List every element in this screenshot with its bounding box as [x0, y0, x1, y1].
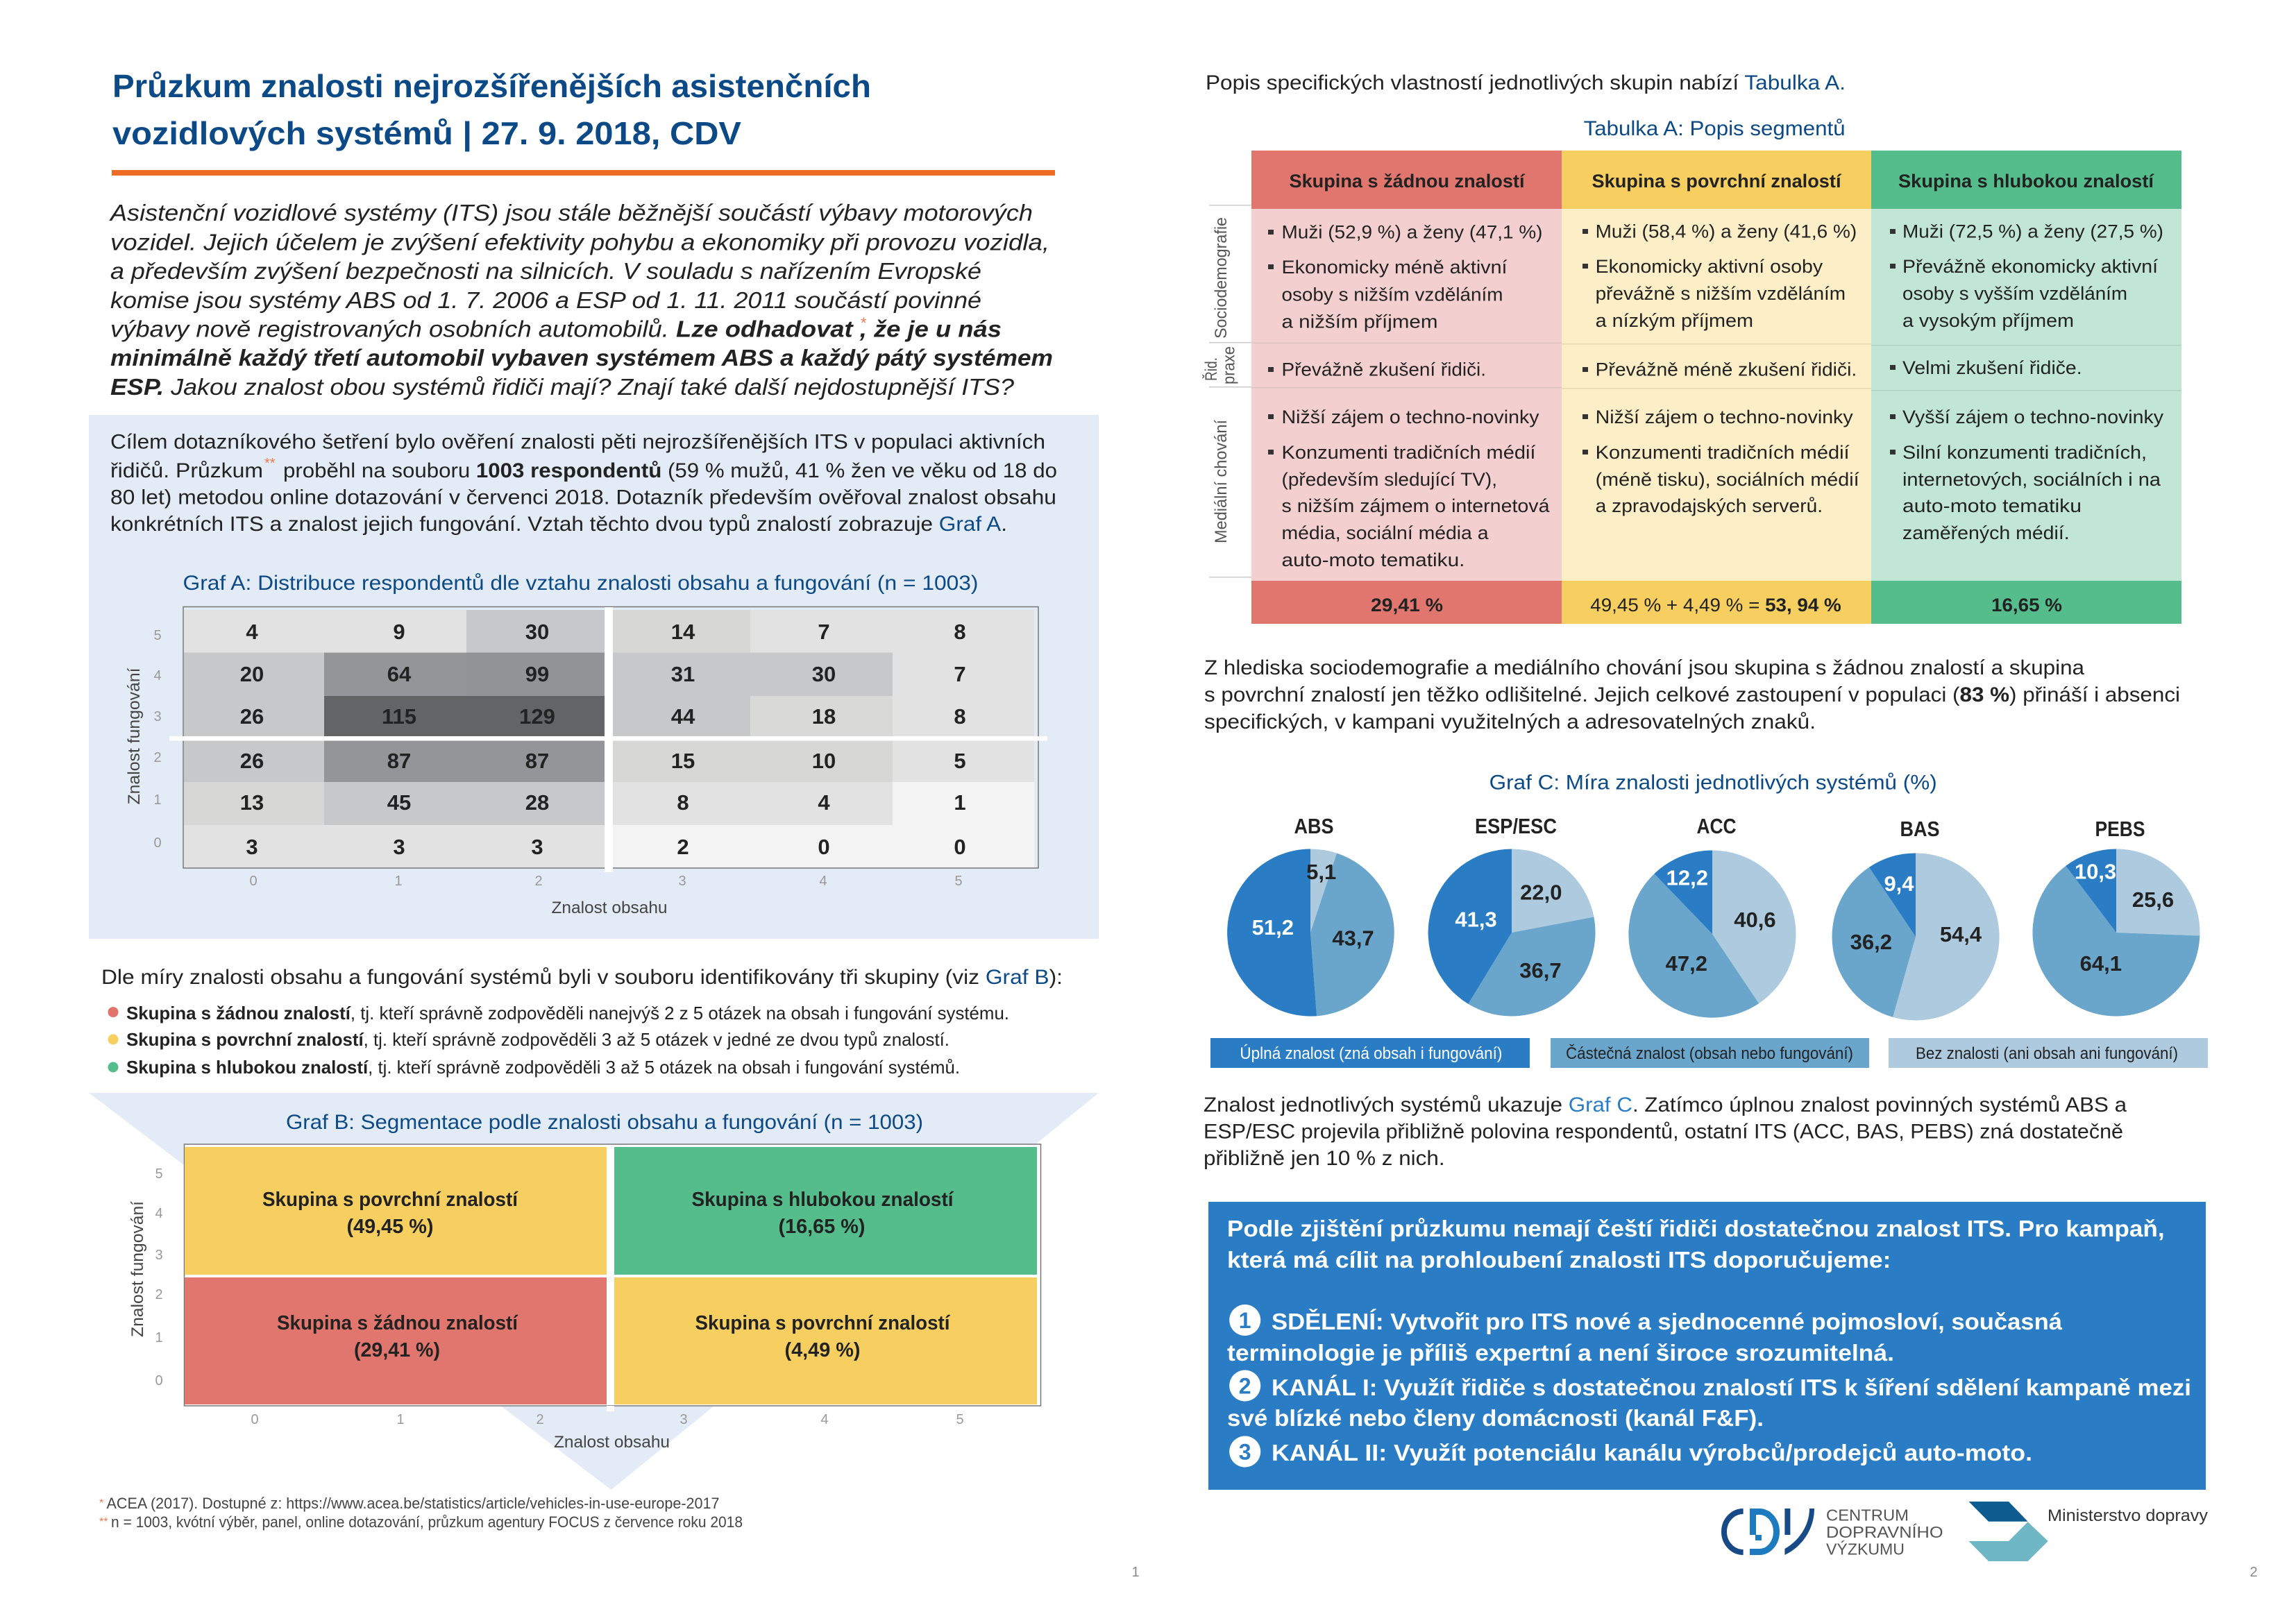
table column: no knowledge: Skupina s žádnou znalostí	[1290, 171, 1526, 192]
chart A axes: 1	[394, 874, 403, 889]
table column: no knowledge: Nižší zájem o techno-novinky	[1281, 407, 1539, 427]
table row labels: praxe	[1220, 346, 1238, 384]
callout: recommendations: KANÁL I: Využít řidiče s dostatečnou znalostí ITS k šíření sdělení kampaně mezi	[1272, 1375, 2191, 1400]
pie chart: PEBS: PEBS	[2095, 817, 2145, 841]
table column: deep knowledge: osoby s vyšším vzděláním	[1902, 283, 2127, 304]
heatmap chart A: 129	[519, 704, 555, 729]
callout: recommendations: své blízké nebo členy domácnosti (kanál F&F).	[1227, 1405, 1764, 1431]
intro text	[109, 200, 1053, 400]
heatmap chart A: 7	[954, 662, 966, 686]
table row labels: Sociodemografie	[1212, 217, 1231, 339]
chart B axes: 3	[679, 1412, 688, 1427]
chart A axes: Znalost obsahu	[551, 899, 668, 917]
segment: superficial knowledge bottom right: (4,49 %)	[784, 1339, 861, 1361]
chart A axes: 5	[153, 628, 162, 643]
chart C legend	[1210, 1038, 2208, 1068]
chart B axes: 5	[956, 1412, 964, 1427]
heatmap chart A: 1	[954, 790, 966, 815]
heatmap chart A: 5	[954, 749, 966, 773]
pie chart: ACC: 47,2	[1666, 951, 1707, 976]
segment: no knowledge	[185, 1277, 607, 1404]
table column: no knowledge: osoby s nižším vzděláním	[1281, 284, 1503, 305]
table row labels	[1202, 205, 1251, 577]
heatmap chart A: 8	[954, 704, 966, 729]
chart B axes: 0	[155, 1373, 163, 1388]
table column: superficial knowledge: Nižší zájem o techno-novinky	[1596, 407, 1853, 427]
chart B axes: 1	[155, 1330, 163, 1345]
chart B title: Graf B: Segmentace podle znalosti obsahu a fungování (n = 1003)	[286, 1111, 923, 1134]
table column: deep knowledge: auto-moto tematiku	[1902, 495, 2082, 516]
page number 1: 1	[1131, 1565, 1140, 1580]
sociodemographic summary text: specifických, v kampani využitelných a adresovatelných znaků.	[1204, 711, 1816, 733]
intro text: Asistenční vozidlové systémy (ITS) jsou stále běžnější součástí výbavy motorových	[109, 200, 1033, 226]
heatmap chart A: 9	[393, 620, 405, 644]
heatmap chart A: 26	[240, 749, 264, 773]
heatmap chart A: 18	[812, 704, 836, 729]
table row labels: Mediální chování	[1212, 420, 1231, 543]
pie chart: ESP/ESC: 41,3	[1455, 908, 1497, 932]
heatmap chart A: 13	[240, 790, 264, 815]
heatmap chart A: 4	[246, 620, 258, 644]
heatmap chart A: 115	[382, 704, 416, 729]
table column: superficial knowledge: 49,45 % + 4,49 % = 53, 94 %	[1590, 595, 1841, 615]
segment legend list	[108, 1003, 1009, 1078]
pie chart: ESP/ESC: 36,7	[1519, 958, 1562, 983]
chart B axes: Znalost obsahu	[554, 1433, 670, 1452]
heatmap chart A: 8	[677, 790, 689, 815]
pie chart: ACC: 40,6	[1734, 908, 1776, 932]
segment: deep knowledge: (16,65 %)	[779, 1216, 865, 1238]
chart A axes: 0	[249, 874, 258, 889]
callout: recommendations: KANÁL II: Využít potenciálu kanálu výrobců/prodejců auto-moto.	[1272, 1440, 2032, 1465]
callout: recommendations: terminologie je příliš expertní a není široce srozumitelná.	[1227, 1340, 1894, 1366]
pie chart: ACC: ACC	[1696, 814, 1737, 838]
icon: number 2	[1229, 1370, 1260, 1402]
icon: number 3: 3	[1239, 1439, 1251, 1464]
chart A axes: 3	[153, 709, 162, 724]
intro text: minimálně každý třetí automobil vybaven systémem ABS a každý pátý systémem	[110, 345, 1053, 371]
intro text: vozidel. Jejich účelem je zvýšení efektivity pohybu a ekonomiky při provozu vozidla,	[110, 229, 1049, 255]
chart C title: Graf C: Míra znalosti jednotlivých systémů (%)	[1489, 772, 1937, 794]
chart A title: Graf A: Distribuce respondentů dle vztahu znalosti obsahu a fungování (n = 1003)	[183, 572, 979, 595]
pie chart: PEBS: 64,1	[2080, 951, 2122, 976]
pie chart: ABS: 5,1	[1306, 860, 1336, 884]
chart C legend: Bez znalosti (ani obsah ani fungování)	[1916, 1044, 2178, 1063]
heatmap chart A: 0	[954, 835, 966, 859]
icon: number 2: 2	[1239, 1374, 1251, 1399]
survey description text: řidičů. Průzkum	[110, 459, 263, 482]
table column: superficial knowledge: a nízkým příjmem	[1596, 310, 1753, 331]
title	[112, 68, 871, 151]
callout: recommendations: Podle zjištění průzkumu nemají čeští řidiči dostatečnou znalost ITS. Pro kampaň,	[1227, 1216, 2165, 1241]
sociodemographic summary text	[1204, 656, 2180, 733]
table column: deep knowledge: 16,65 %	[1991, 595, 2062, 615]
heatmap chart A	[169, 606, 1047, 872]
table intro text: Popis specifických vlastností jednotlivých skupin nabízí Tabulka A.	[1206, 71, 1846, 94]
chart B axes: 2	[155, 1287, 163, 1302]
logo: Ministerstvo dopravy	[1968, 1502, 2208, 1561]
segment: deep knowledge: Skupina s hlubokou znalostí	[691, 1189, 954, 1211]
survey description text	[110, 430, 1057, 536]
logo: Centrum dopravního výzkumu	[1724, 1506, 1943, 1558]
table column: deep knowledge: Silní konzumenti tradičních,	[1902, 442, 2147, 463]
chart C commentary text	[1204, 1094, 2127, 1170]
pie chart: BAS	[1832, 817, 2000, 1020]
table column: superficial knowledge	[1562, 151, 1871, 624]
table column: superficial knowledge: a zpravodajských serverů.	[1596, 495, 1823, 516]
chart B axes: Znalost fungování	[128, 1201, 147, 1337]
table column: no knowledge: (především sledující TV),	[1281, 469, 1497, 490]
table column: deep knowledge	[1871, 151, 2181, 624]
table column: no knowledge: Ekonomicky méně aktivní	[1281, 257, 1508, 278]
pie chart: ESP/ESC: 22,0	[1520, 880, 1562, 905]
chart C commentary text: Znalost jednotlivých systémů ukazuje Graf C. Zatímco úplnou znalost povinných systémů ABS a	[1204, 1094, 2127, 1116]
footnotes: *	[99, 1497, 103, 1509]
intro text: a především zvýšení bezpečnosti na silnicích. V souladu s nařízením Evropské	[110, 258, 981, 284]
pie chart: ABS: 43,7	[1332, 926, 1374, 951]
survey description text: Cílem dotazníkového šetření bylo ověření znalosti pěti nejrozšířenějších ITS v populaci aktivních	[110, 430, 1045, 454]
segment: superficial knowledge bottom right: Skupina s povrchní znalostí	[695, 1312, 950, 1334]
pie chart: ABS	[1227, 814, 1394, 1016]
chart C commentary text: ESP/ESC projevila přibližně polovina respondentů, ostatní ITS (ACC, BAS, PEBS) zná dostatečně	[1204, 1120, 2123, 1144]
funnel triangle behind chart B	[89, 1093, 1099, 1490]
table column: deep knowledge: Muži (72,5 %) a ženy (27,5 %)	[1902, 221, 2163, 241]
table column: deep knowledge: Vyšší zájem o techno-novinky	[1902, 407, 2164, 427]
table column: no knowledge: s nižším zájmem o internetová	[1281, 495, 1551, 516]
title: vozidlových systémů | 27. 9. 2018, CDV	[112, 115, 741, 151]
heatmap chart A: 64	[387, 662, 412, 686]
pie chart: PEBS: 25,6	[2132, 887, 2174, 912]
heatmap chart A: 30	[525, 620, 549, 644]
table column: no knowledge: 29,41 %	[1371, 595, 1443, 615]
table column: no knowledge: média, sociální média a	[1281, 522, 1489, 543]
heatmap chart A: 8	[954, 620, 966, 644]
pie chart: ABS: ABS	[1294, 814, 1334, 838]
chart B axes: 5	[155, 1166, 163, 1182]
logo: Ministerstvo dopravy: Ministerstvo dopravy	[2048, 1506, 2208, 1525]
sociodemographic summary text: s povrchní znalostí jen těžko odlišitelné. Jejich celkové zastoupení v populaci ( 83 %) přináší i absenci	[1204, 683, 2180, 706]
pie chart: ABS: 51,2	[1252, 915, 1294, 940]
chart B axes: 3	[155, 1248, 163, 1263]
intro text: ESP. Jakou znalost obou systémů řidiči mají? Znají také další nejdostupnější ITS?	[110, 374, 1015, 400]
segment: deep knowledge	[614, 1147, 1037, 1275]
table column: no knowledge: a nižším příjmem	[1281, 312, 1438, 332]
table column: deep knowledge: internetových, sociálních i na	[1902, 469, 2161, 490]
chart A axes: 4	[819, 874, 827, 889]
callout: recommendations	[1208, 1202, 2206, 1490]
segment legend list: Skupina s povrchní znalostí, tj. kteří správně zodpověděli 3 až 5 otázek v jedné ze dvou typů znalostí.	[126, 1029, 949, 1050]
footnotes: n = 1003, kvótní výběr, panel, online dotazování, průzkum agentury FOCUS z července roku 2018	[111, 1513, 743, 1531]
heatmap chart A: 87	[387, 749, 411, 773]
table column: deep knowledge: a vysokým příjmem	[1902, 310, 2074, 331]
chart C legend: Částečná znalost (obsah nebo fungování)	[1566, 1044, 1853, 1063]
chart B segmentation matrix	[185, 1144, 1041, 1411]
chart B axes: 4	[155, 1206, 163, 1221]
segment: superficial knowledge top left	[185, 1147, 607, 1275]
heatmap chart A: 0	[818, 835, 830, 859]
chart A axes: 0	[153, 835, 162, 851]
footnotes: ACEA (2017). Dostupné z: https://www.acea.be/statistics/article/vehicles-in-use-europe-2017	[107, 1495, 719, 1512]
chart A axes: 3	[678, 874, 686, 889]
table column: deep knowledge: zaměřených médií.	[1902, 522, 2070, 543]
heatmap chart A: 14	[671, 620, 695, 644]
page number 2: 2	[2249, 1565, 2258, 1580]
icon: number 1: 1	[1239, 1308, 1251, 1333]
segment: superficial knowledge bottom right	[614, 1277, 1037, 1404]
heatmap chart A: 31	[671, 662, 695, 686]
heatmap chart A: 28	[525, 790, 549, 815]
heatmap chart A: 20	[240, 662, 264, 686]
segment legend list: Skupina s hlubokou znalostí, tj. kteří správně zodpověděli 3 až 5 otázek na obsah i fungování systémů.	[126, 1057, 960, 1078]
chart A axes: 4	[153, 668, 162, 683]
heatmap chart A: 87	[525, 749, 549, 773]
heatmap chart A: 44	[671, 704, 695, 729]
icon: number 3	[1229, 1436, 1260, 1467]
pie chart: ACC: 12,2	[1666, 866, 1708, 890]
table A: segment descriptions	[1202, 151, 2181, 624]
footnotes: **	[99, 1516, 108, 1528]
intro text: výbavy nově registrovaných osobních automobilů. Lze odhadovat , že je u nás	[110, 316, 1002, 342]
table column: superficial knowledge: Muži (58,4 %) a ženy (41,6 %)	[1596, 221, 1857, 241]
segment legend list: Skupina s žádnou znalostí, tj. kteří správně zodpověděli nanejvýš 2 z 5 otázek na obsah i fungování systému.	[126, 1003, 1009, 1023]
chart B axes	[128, 1166, 964, 1452]
chart B axes: 2	[536, 1412, 544, 1427]
table column: superficial knowledge: (méně tisku), sociálních médií	[1596, 469, 1859, 490]
callout: recommendations: SDĚLENÍ: Vytvořit pro ITS nové a sjednocenné pojmosloví, současná	[1272, 1309, 2063, 1334]
segment: no knowledge: Skupina s žádnou znalostí	[277, 1312, 518, 1334]
chart A axes: 1	[153, 792, 162, 808]
survey description text: **	[264, 456, 276, 471]
logo: Centrum dopravního výzkumu: CENTRUM	[1826, 1506, 1909, 1524]
table column: no knowledge: Převážně zkušení řidiči.	[1281, 359, 1486, 380]
pie chart: PEBS	[2032, 817, 2200, 1017]
survey description text: proběhl na souboru 1003 respondentů (59 % mužů, 41 % žen ve věku od 18 do	[283, 459, 1057, 482]
chart B axes: 4	[820, 1412, 829, 1427]
heatmap chart A: 10	[812, 749, 836, 773]
segment: superficial knowledge top left: (49,45 %)	[347, 1216, 433, 1238]
heatmap chart A: 3	[393, 835, 405, 859]
table column: superficial knowledge: Ekonomicky aktivní osoby	[1596, 256, 1823, 277]
survey description text: 80 let) metodou online dotazování v červenci 2018. Dotazník především ověřoval znalost obsahu	[110, 486, 1056, 509]
chart A axes: 5	[954, 874, 963, 889]
segment intro text: Dle míry znalosti obsahu a fungování systémů byli v souboru identifikovány tři skupiny (viz Graf B):	[101, 966, 1063, 989]
orange title rule	[112, 170, 1055, 176]
intro text: komise jsou systémy ABS od 1. 7. 2006 a ESP od 1. 11. 2011 součástí povinné	[110, 287, 981, 313]
footnotes	[99, 1495, 743, 1531]
chart A axes: 2	[153, 750, 162, 765]
table column: superficial knowledge: Skupina s povrchní znalostí	[1592, 171, 1842, 192]
pie chart: ESP/ESC	[1428, 814, 1596, 1016]
segment: superficial knowledge top left: Skupina s povrchní znalostí	[262, 1189, 518, 1211]
table column: no knowledge: Konzumenti tradičních médií	[1281, 442, 1536, 463]
heatmap chart A: 7	[818, 620, 830, 644]
segment: no knowledge: (29,41 %)	[354, 1339, 440, 1361]
panel: survey description and chart A	[89, 415, 1099, 939]
table column: no knowledge: auto-moto tematiku.	[1281, 550, 1464, 570]
heatmap chart A: 3	[531, 835, 543, 859]
chart B axes: 0	[251, 1412, 259, 1427]
sociodemographic summary text: Z hlediska sociodemografie a mediálního chování jsou skupina s žádnou znalostí a skupina	[1204, 656, 2084, 679]
heatmap chart A: 45	[387, 790, 411, 815]
table column: superficial knowledge: převážně s nižším vzděláním	[1596, 283, 1846, 304]
table column: superficial knowledge: Převážně méně zkušení řidiči.	[1596, 359, 1857, 380]
table column: no knowledge	[1251, 151, 1562, 624]
table title: Tabulka A: Popis segmentů	[1584, 117, 1846, 140]
callout: recommendations: která má cílit na prohloubení znalosti ITS doporučujeme:	[1227, 1247, 1891, 1273]
pie chart: BAS: 54,4	[1940, 922, 1982, 946]
heatmap chart A: 4	[818, 790, 830, 815]
intro text: *	[861, 314, 867, 332]
table column: deep knowledge: Převážně ekonomicky aktivní	[1902, 256, 2159, 277]
chart A axes: Znalost fungování	[125, 668, 144, 805]
pie chart: PEBS: 10,3	[2075, 859, 2116, 884]
table column: deep knowledge: Velmi zkušení řidiče.	[1902, 357, 2082, 378]
heatmap chart A: 15	[671, 749, 695, 773]
survey description text: konkrétních ITS a znalost jejich fungování. Vztah těchto dvou typů znalostí zobrazuje Graf A.	[110, 513, 1007, 536]
logo: Centrum dopravního výzkumu: DOPRAVNÍHO	[1826, 1523, 1943, 1541]
logo: Centrum dopravního výzkumu: VÝZKUMU	[1826, 1540, 1905, 1558]
table column: deep knowledge: Skupina s hlubokou znalostí	[1898, 171, 2155, 192]
chart B axes: 1	[396, 1412, 405, 1427]
pie chart: BAS: 36,2	[1850, 930, 1892, 954]
table column: no knowledge: Muži (52,9 %) a ženy (47,1 %)	[1281, 222, 1542, 243]
chart C commentary text: přibližně jen 10 % z nich.	[1204, 1147, 1445, 1170]
pie chart: BAS: 9,4	[1884, 872, 1914, 896]
heatmap chart A: 26	[240, 704, 264, 729]
heatmap chart A: 30	[812, 662, 836, 686]
icon: number 1	[1229, 1305, 1260, 1336]
heatmap chart A: 99	[525, 662, 549, 686]
heatmap chart A: 3	[246, 835, 258, 859]
table column: superficial knowledge: Konzumenti tradičních médií	[1596, 442, 1850, 463]
title: Průzkum znalosti nejrozšířenějších asistenčních	[112, 68, 871, 104]
chart A axes	[125, 628, 963, 917]
chart A axes: 2	[534, 874, 543, 889]
table row labels: Řid.	[1202, 357, 1221, 381]
pie chart: ACC	[1628, 814, 1796, 1018]
heatmap chart A: 2	[677, 835, 689, 859]
pie chart: BAS: BAS	[1900, 817, 1939, 841]
chart C legend: Úplná znalost (zná obsah i fungování)	[1240, 1044, 1502, 1063]
pie chart: ESP/ESC: ESP/ESC	[1475, 814, 1557, 838]
